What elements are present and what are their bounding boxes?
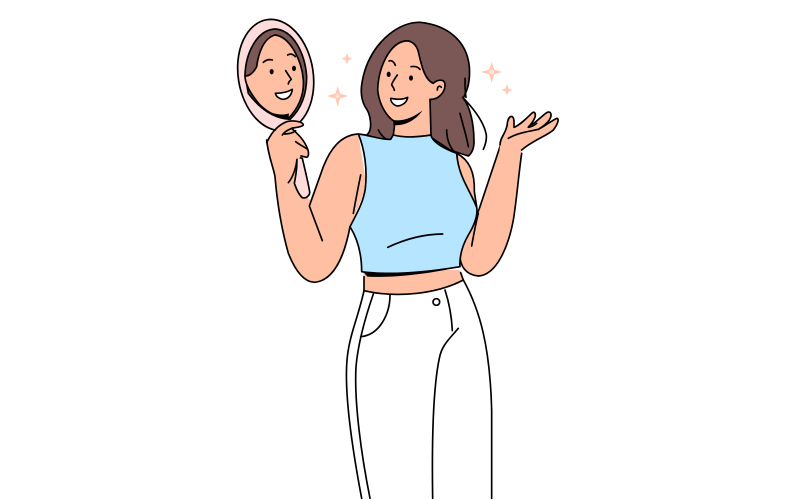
small sparkle [342,53,352,64]
top crease [388,234,443,247]
eyes [387,72,413,81]
woman's face and neck [378,41,445,137]
sparkles [327,53,512,107]
sparkle [327,86,348,107]
hand holding the mirror [267,121,309,183]
neck shadow [393,111,422,125]
eyebrows and nose [389,61,441,90]
sleeveless blue top [350,134,478,277]
large sparkle right [481,62,502,83]
right shoulder [457,153,477,207]
smile [391,97,408,106]
right arm and raised hand [460,112,558,276]
mirror handle [294,157,310,198]
top hem shadow [363,267,460,277]
long hair behind the head [361,22,486,156]
mirror glass with reflection [245,29,307,119]
small sparkle right [502,84,512,96]
mirror frame [230,14,321,136]
hand mirror [230,14,321,198]
left arm and shoulder [267,127,367,282]
trousers [346,280,492,500]
bare midriff [363,270,463,294]
